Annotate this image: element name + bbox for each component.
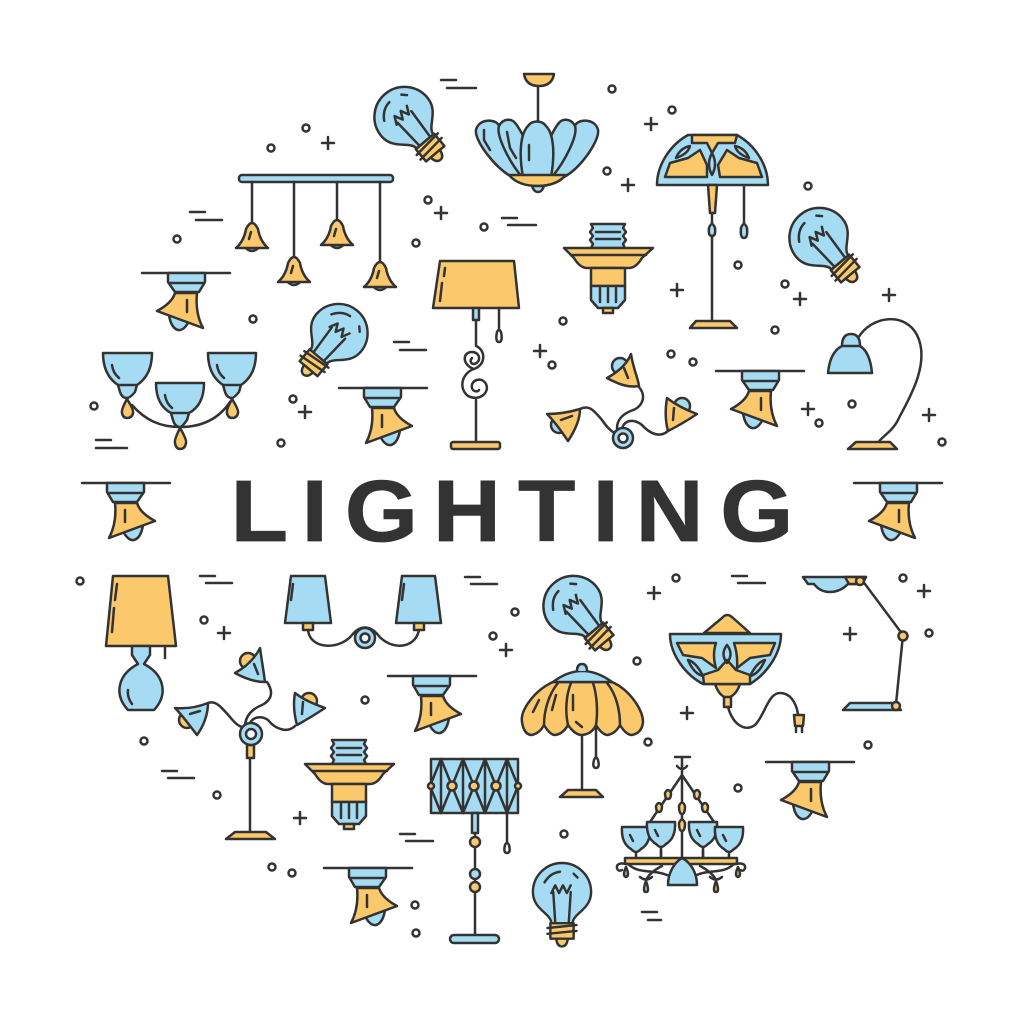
icon: ceiling spot 7 <box>766 762 854 819</box>
icon: socket bottom <box>305 740 394 829</box>
icon: shade floor lamp <box>433 261 519 449</box>
icon: rectangular shade floor lamp <box>428 759 521 943</box>
icon: wall tiffany lamp with plug <box>670 615 804 732</box>
icon: ceiling spot 1 <box>142 273 230 330</box>
icon: three-bell small lamp <box>547 354 697 448</box>
icon: ceiling spot 2 <box>339 388 427 445</box>
icon: bulb centre <box>531 564 632 668</box>
icon: table lamp with vase <box>106 576 176 710</box>
icon: umbrella floor lamp <box>522 664 643 797</box>
icon: flower chandelier <box>476 74 598 192</box>
icon: bulb top <box>362 75 463 179</box>
icon: bulb right <box>777 196 878 300</box>
icon: bulb bottom <box>533 863 591 946</box>
icon: socket top <box>564 224 653 313</box>
icon: large chandelier <box>617 757 745 892</box>
icon: double wall sconce <box>285 576 441 648</box>
icon: three-bell floor lamp <box>175 648 325 839</box>
icon: bulb left <box>281 292 379 393</box>
icon: arm desk lamp <box>803 577 908 710</box>
icon: ceiling spot 5 <box>854 483 942 540</box>
decorative scatter: circles, plus signs, dashes <box>76 80 946 936</box>
icon: pendant bar lamp <box>236 175 396 290</box>
icon: three-arm wall chandelier <box>103 353 256 449</box>
icon: ceiling spot 3 <box>716 371 804 428</box>
title: LIGHTING <box>231 463 793 560</box>
icon: ceiling spot 8 <box>324 868 412 925</box>
icon: arc desk lamp <box>828 319 921 449</box>
icon: tiffany floor lamp <box>657 135 768 328</box>
icon: ceiling spot 6 <box>388 676 476 733</box>
icon: ceiling spot 4 <box>82 483 170 540</box>
